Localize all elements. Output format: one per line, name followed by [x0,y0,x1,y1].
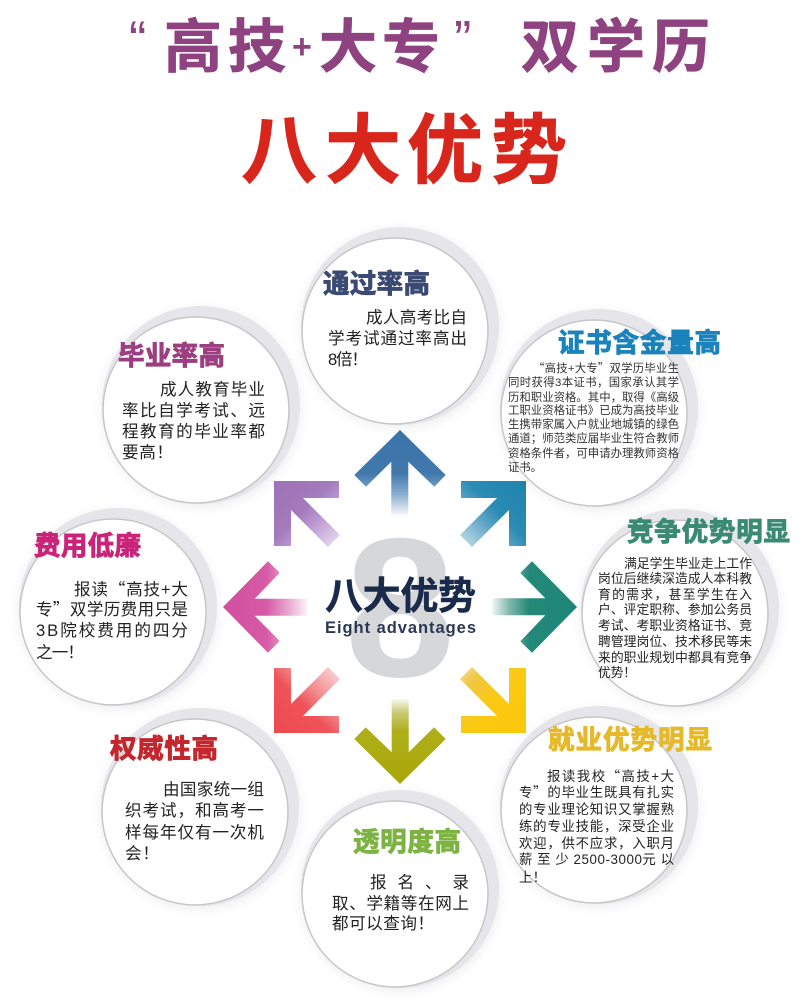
center heading: 八大优势 [325,576,476,618]
body text: 专”的毕业生既具有扎实 [519,781,674,801]
body text: “高技+大专”双学历毕业生 [533,360,679,376]
title: 高技+大专 双学历: ” [454,11,471,69]
arrow: right green [492,561,577,653]
body text: 同时获得3本证书，国家承认其学 [508,375,679,389]
body text [122,380,265,462]
body text: 来的职业规划中都具有竞争 [598,650,752,665]
body text [36,576,188,662]
arrow: left magenta [223,561,308,653]
arrow: up blue [354,430,446,515]
body text: 薪 至 少 2500-3000元 以 [519,852,674,867]
body text [125,780,264,863]
body text: 专”双学历费用只是 [36,596,188,620]
body text [508,360,680,474]
body text: 由国家统一组 [163,780,264,799]
center english label: Eight advantages [325,619,476,637]
title: 高技+大专 双学历: 大专 [319,15,440,80]
body text: 率比自学考试、远 [122,401,265,420]
body text: 的专业理论知识又掌握熟 [519,801,674,817]
body text: 3B院校费用的四分 [36,621,188,640]
body text [519,765,674,885]
body text [598,556,752,680]
body text: 历和职业资格。其中，取得《高级 [508,390,679,404]
body text: 8倍！ [328,350,368,369]
body text: 取、学籍等在网上 [332,894,469,913]
heading: 透明度高 [353,827,461,857]
body text: 满足学生毕业走上工作 [624,556,752,571]
body text: 工职业资格证书》已成为高技毕业 [508,403,679,417]
body text: 考试、考职业资格证书、竞 [598,618,752,633]
body text: 练的专业技能，深受企业 [519,818,674,834]
heading: 竞争优势明显 [627,517,790,547]
title: 高技+大专 双学历: 高技 [164,15,286,80]
panel: 费用低廉 [19,508,217,709]
title: 高技+大专 双学历: “ [129,11,146,69]
big numeral 8: 8 [345,497,455,718]
body text: 育的需求，甚至学生在入 [598,587,752,602]
body text: 织考试，和高考一 [125,801,264,820]
arrow: upper right blue [460,481,526,547]
panel: 竞争优势明显 [581,509,790,710]
heading: 费用低廉 [34,531,141,561]
heading: 权威性高 [110,734,218,764]
body text: 报读“高技+大 [74,576,188,600]
arrow: lower right yellow [460,667,526,733]
panel: 就业优势明显 [500,706,712,907]
heading: 通过率高 [323,269,430,299]
panel: 证书含金量高 [500,309,721,510]
title: 高技+大专 双学历 [129,11,710,80]
body text [332,873,469,933]
body text: 生携带家属入户就业地城镇的绿色 [508,417,679,431]
body text: 程教育的毕业率都 [122,422,265,441]
body text: 岗位后继续深造成人本科教 [598,571,752,586]
title: 高技+大专 双学历: + [292,28,312,66]
title: 八大优势: 八大优势 [241,109,567,194]
body text: 都可以查询！ [332,914,434,933]
panel: 毕业率高 [102,306,300,507]
body text: 聘管理岗位、技术移民等未 [598,634,752,649]
heading: 毕业率高 [118,341,225,371]
body text: 优势！ [598,665,636,680]
panel: 通过率高 [301,227,499,428]
body text: 会！ [125,844,159,863]
body text: 要高！ [122,443,173,462]
body text: 成人教育毕业 [160,380,265,399]
body text [328,308,467,369]
panel: 透明度高 [301,790,499,991]
arrow: down olive [354,699,446,784]
body text: 学考试通过率高出 [328,329,467,348]
body text: 通道；师范类应届毕业生符合教师 [508,431,679,445]
body text: 资格条件者，可申请办理教师资格 [508,446,680,460]
body text: 户、评定职称、参加公务员 [598,602,752,617]
body text: 之一！ [36,643,84,662]
panel: 权威性高 [101,708,299,909]
body text: 成人高考比自 [366,308,467,327]
center hub [308,497,492,718]
body text: 欢迎，供不应求，入职月 [519,835,674,851]
heading: 证书含金量高 [558,328,721,358]
body text: 样每年仅有一次机 [125,823,264,842]
title: 高技+大专 双学历: 双学历 [521,15,710,80]
arrow: upper left purple [274,481,340,547]
body text: 上！ [519,870,546,885]
body text: 报读我校“高技+大 [547,765,674,785]
arrow: lower left red [274,667,340,733]
body text: 报名、录 [370,873,469,892]
heading: 就业优势明显 [548,725,712,755]
body text: 证书。 [508,461,542,474]
